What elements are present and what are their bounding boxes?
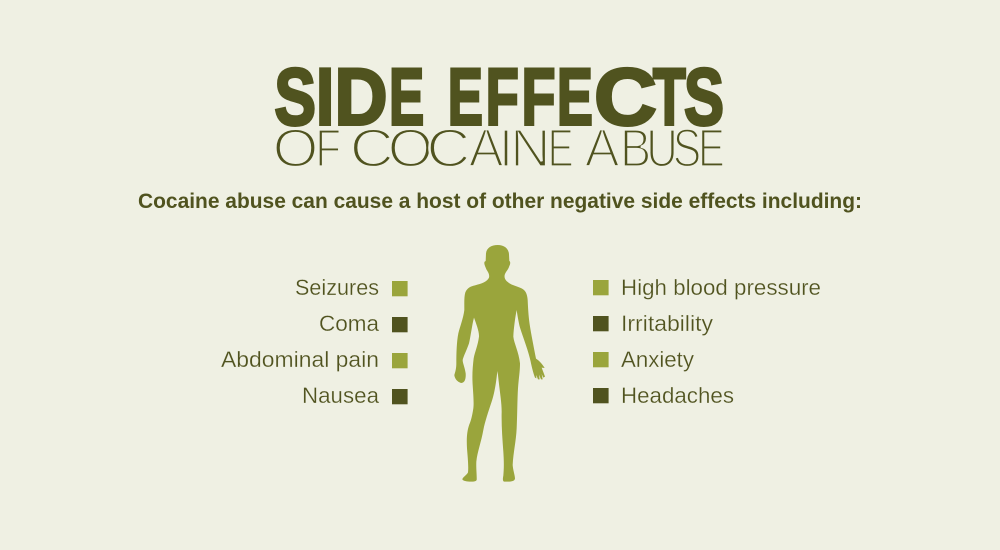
title line: side effects: F <box>522 52 556 142</box>
title line: side effects: D <box>334 52 388 142</box>
title line: side effects: E <box>389 52 424 142</box>
item: coma <box>319 311 408 336</box>
left effects list <box>221 275 408 408</box>
title line: of cocaine abuse: C <box>350 118 394 178</box>
item: coma: Coma <box>319 311 380 336</box>
title line: side effects: C <box>594 52 657 142</box>
item: irritability: Irritability <box>621 311 713 336</box>
item: seizures: Seizures <box>295 275 379 300</box>
item: anxiety: Anxiety <box>621 347 694 372</box>
item: abdominal pain: Abdominal pain <box>221 347 379 372</box>
icon: human body silhouette <box>454 245 545 482</box>
title line: side effects: T <box>653 52 686 142</box>
title line: of cocaine abuse: A <box>469 118 504 178</box>
title line: side effects: S <box>274 52 316 142</box>
title line: side effects: F <box>486 52 519 142</box>
title line: side effects: I <box>316 52 334 142</box>
title line: of cocaine abuse: I <box>499 118 513 178</box>
title line: side effects: E <box>557 52 593 142</box>
subtitle: Cocaine abuse can cause a host of other negative side effects including: <box>138 190 862 213</box>
title line: of cocaine abuse: C <box>426 118 470 178</box>
title line: of cocaine abuse: E <box>698 118 725 178</box>
title line: of cocaine abuse: O <box>273 118 318 178</box>
title line: of cocaine abuse: N <box>510 118 551 178</box>
title line: of cocaine abuse: B <box>620 118 651 178</box>
title line: of cocaine abuse: E <box>548 118 574 178</box>
title line: side effects: S <box>684 52 724 142</box>
title line: side effects: E <box>448 52 483 142</box>
title line: of cocaine abuse: U <box>646 118 678 178</box>
item: high blood pressure: High blood pressure <box>621 275 821 300</box>
title line: of cocaine abuse: F <box>315 118 341 178</box>
item: nausea: Nausea <box>302 383 380 408</box>
title <box>273 52 725 178</box>
title line: of cocaine abuse: A <box>585 118 620 178</box>
item: headaches: Headaches <box>621 383 734 408</box>
title line: of cocaine abuse: O <box>388 118 433 178</box>
title line: of cocaine abuse: S <box>673 118 701 178</box>
right effects list <box>593 275 821 408</box>
